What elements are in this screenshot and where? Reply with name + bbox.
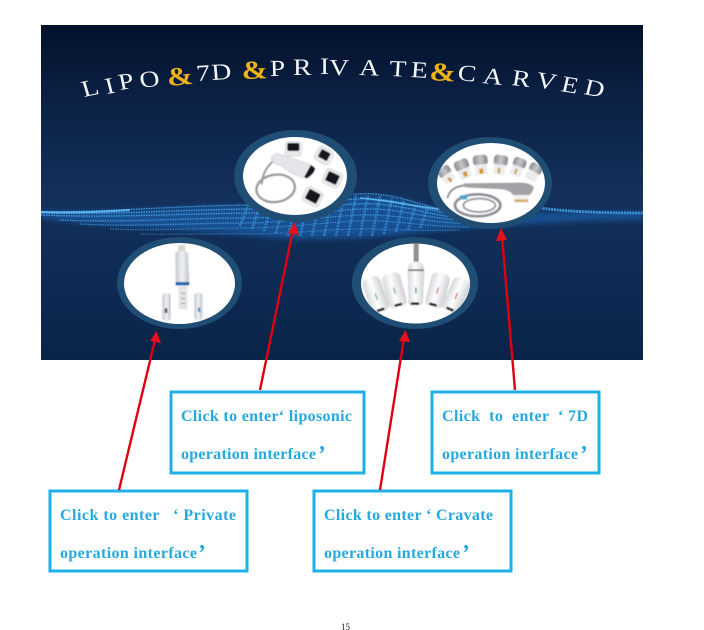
arrow: to private circle (119, 331, 161, 490)
callout box: 7D: operation interface (442, 446, 578, 463)
product circle: cravate cartridges (352, 237, 478, 329)
callout box: 7D: Click to enter ‘ 7D (442, 408, 588, 425)
title: LIPO & 7D & PRIVATE & CARVED: CARVED (456, 60, 607, 103)
title: LIPO & 7D & PRIVATE & CARVED: LIPO (78, 66, 162, 102)
callout box: liposonic: Click to enter‘ liposonic (181, 408, 352, 425)
title: LIPO & 7D & PRIVATE & CARVED: PRIVATE (270, 54, 429, 83)
arrow: to 7D circle (496, 228, 515, 390)
title: LIPO & 7D & PRIVATE & CARVED: & (241, 56, 268, 85)
title: LIPO & 7D & PRIVATE & CARVED: & (165, 61, 195, 92)
callout box: cravate: operation interface (324, 545, 460, 562)
wave: glowing blue particle band (41, 194, 643, 239)
callout box: private: operation interface (60, 545, 197, 562)
arrow: to liposonic circle (260, 222, 299, 390)
callout box: liposonic (171, 392, 364, 473)
title: LIPO & 7D & PRIVATE & CARVED: & (428, 57, 457, 88)
callout box: cravate (314, 491, 511, 571)
title: LIPO & 7D & PRIVATE & CARVED (80, 58, 604, 97)
callout box: liposonic: operation interface (181, 446, 316, 463)
callout box: cravate: Click to enter ‘ Cravate (324, 507, 493, 524)
product circle: liposonic handpiece (234, 130, 357, 222)
arrow: to cravate circle (380, 330, 410, 490)
callout box: private: Click to enter ‘ Private (60, 507, 236, 524)
callout box: private (50, 491, 247, 571)
product circle: 7D handpiece (428, 137, 552, 229)
callout box: private: ’ (197, 541, 205, 567)
panel: product banner (41, 25, 643, 360)
callout box: cravate: ’ (461, 541, 469, 567)
product circle: private handpiece (117, 237, 242, 329)
callout box: 7D: ’ (579, 442, 587, 468)
callout box: liposonic: ’ (317, 442, 325, 468)
callout box: 7D (432, 392, 599, 473)
title: LIPO & 7D & PRIVATE & CARVED: 7D (195, 59, 232, 86)
